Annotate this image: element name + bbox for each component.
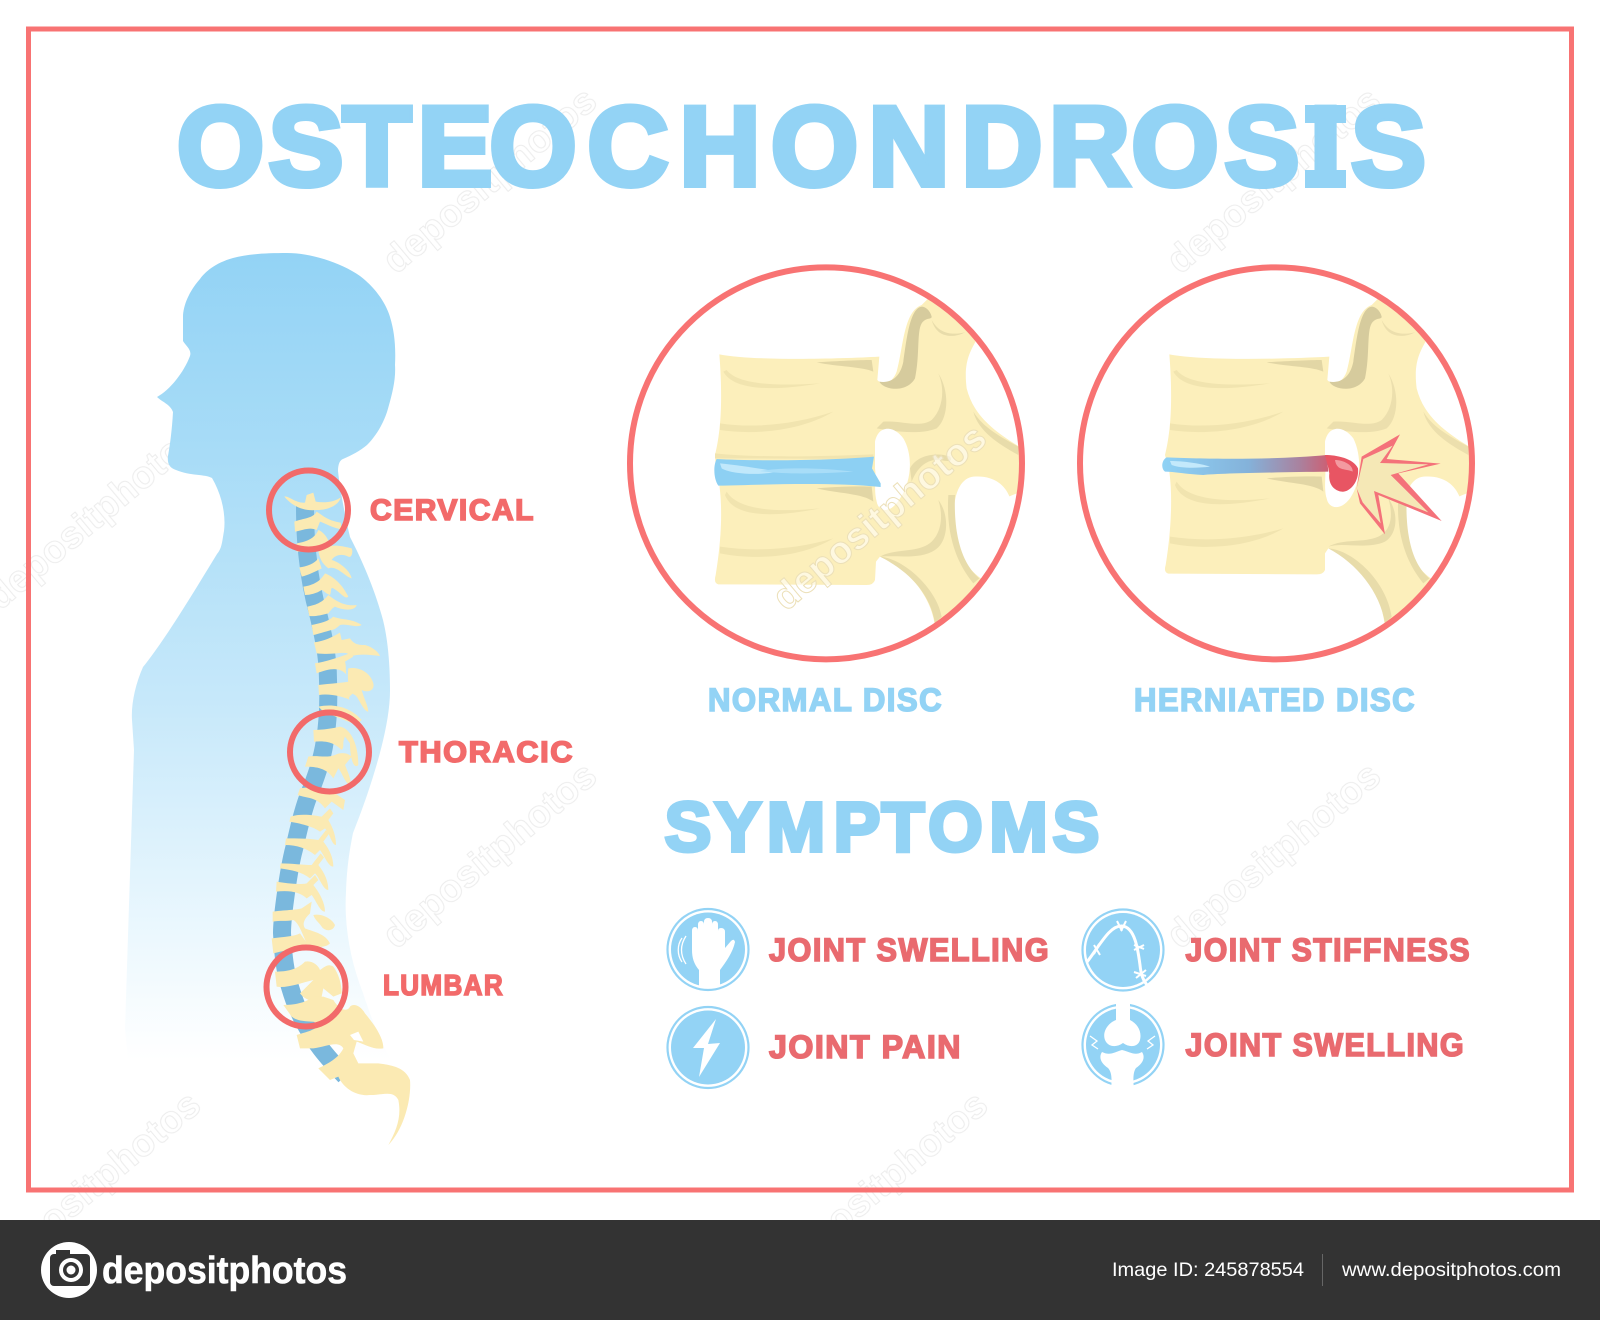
watermark: depositphotos — [1159, 754, 1389, 957]
heading: symptoms: SYMPTOMS — [665, 788, 1099, 866]
footer bar — [0, 1220, 1600, 1320]
vertebrae: lower thoracic, lumbar and sacrum — [272, 808, 410, 1145]
vertebrae bone — [1165, 298, 1475, 627]
symptom: joint stiffness: JOINT STIFFNESS — [1186, 932, 1471, 968]
spinal canal — [875, 429, 910, 510]
panel: normal disc — [630, 267, 1025, 659]
icon: barbed wire stiffness — [1082, 910, 1164, 990]
footer divider — [1322, 1254, 1323, 1286]
watermark — [0, 79, 1389, 1286]
flattened disc — [1162, 455, 1328, 475]
marker: thoracic — [290, 712, 369, 792]
label: lumbar: LUMBAR — [383, 970, 504, 1002]
vertebrae: cervical and thoracic — [284, 493, 380, 810]
footer image id: Image ID: 245878554 — [1112, 1259, 1304, 1281]
bulge highlight — [1335, 460, 1353, 472]
icon: swelling hand — [668, 909, 748, 990]
label: herniated disc: HERNIATED DISC — [1134, 682, 1416, 718]
label: thoracic: THORACIC — [399, 736, 574, 769]
label: cervical: CERVICAL — [370, 494, 535, 527]
footer logo: depositphotos — [102, 1250, 347, 1292]
symptom: joint swelling second: JOINT SWELLING — [1186, 1027, 1465, 1063]
footer logo — [41, 1242, 347, 1298]
icon: lightning pain — [668, 1007, 748, 1088]
watermark: depositphotos — [766, 1083, 996, 1286]
title: OSTEOCHONDROSIS — [177, 84, 1426, 209]
spinal canal — [1325, 429, 1359, 507]
panel: spine and body — [125, 253, 410, 1145]
symptom: joint swelling: JOINT SWELLING — [769, 932, 1050, 968]
ring — [630, 267, 1022, 659]
intervertebral disc — [714, 457, 881, 487]
watermark: depositphotos — [1159, 79, 1389, 282]
marker: lumbar — [266, 948, 346, 1026]
panel: herniated disc — [1080, 267, 1475, 659]
watermark: depositphotos — [375, 79, 605, 282]
watermark: depositphotos — [375, 754, 605, 957]
symptom: joint pain: JOINT PAIN — [769, 1029, 962, 1065]
vertebrae bone — [715, 298, 1025, 627]
pain burst — [1357, 434, 1442, 534]
disc highlight — [1170, 461, 1210, 468]
spinal column — [282, 505, 345, 1076]
body silhouette — [125, 253, 395, 1058]
label: normal disc: NORMAL DISC — [708, 682, 943, 718]
icon: knee joint — [1082, 1001, 1164, 1089]
footer website: www.depositphotos.com — [1341, 1259, 1561, 1281]
herniated bulge — [1325, 455, 1358, 492]
ring — [1080, 267, 1472, 659]
marker: cervical — [269, 470, 348, 550]
watermark over normal disc: depositphotos — [765, 416, 995, 619]
